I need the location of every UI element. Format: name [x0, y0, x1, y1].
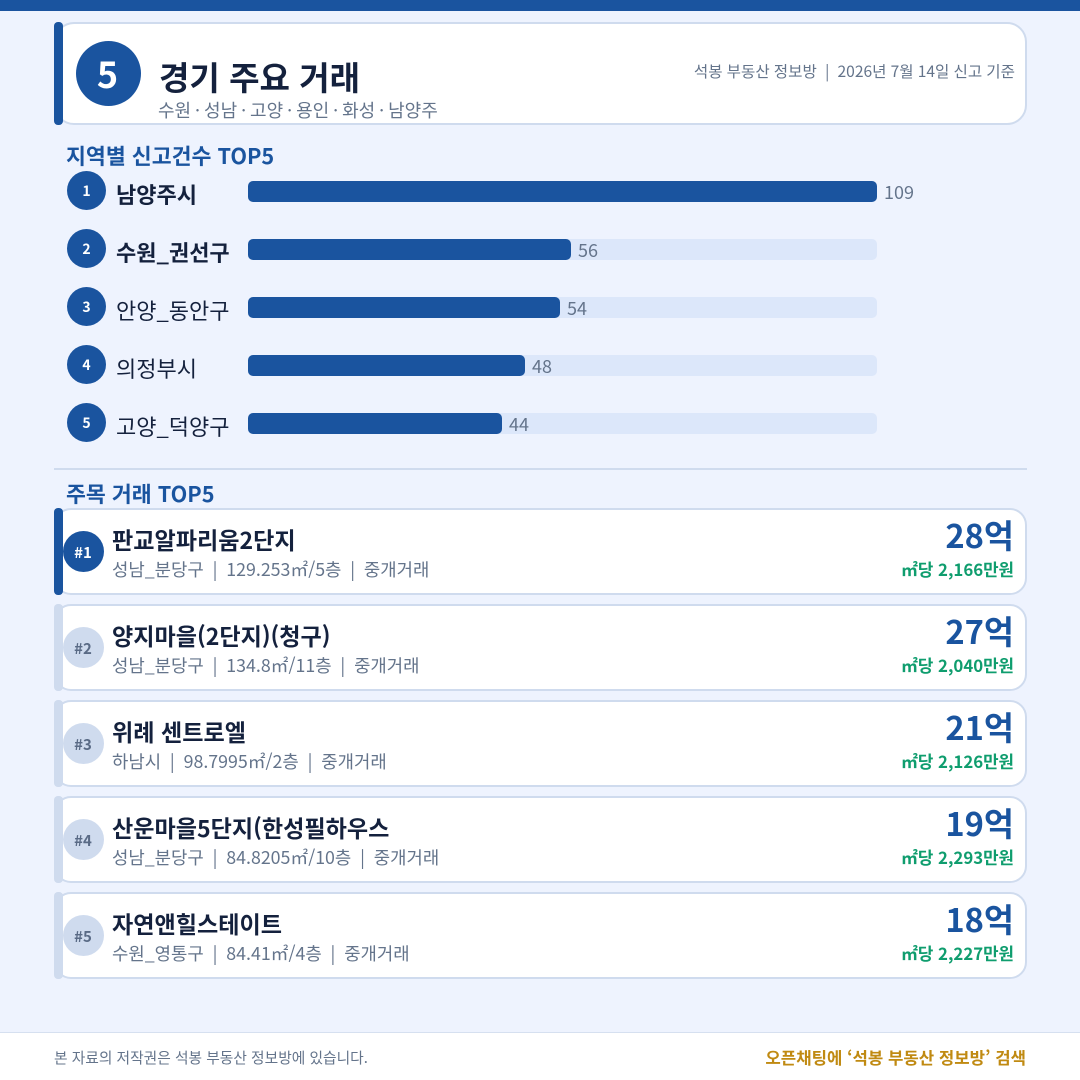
deal card 5: #5 [74, 926, 92, 947]
deal card 1: 성남_분당구 | 129.253㎡/5층 | 중개거래 [112, 556, 429, 582]
deal card 5: 수원_영통구 | 84.41㎡/4층 | 중개거래 [112, 940, 410, 966]
deal card 2: 27억 [945, 607, 1014, 654]
deal card 4: #4 [74, 830, 92, 851]
deal card 3: #3 [74, 734, 92, 755]
deal card 5: 18억 [945, 895, 1014, 942]
deal card 3: ㎡당 2,126만원 [901, 748, 1014, 772]
deal card 1: 판교알파리움2단지 [112, 522, 296, 556]
bar row 4: 48 [532, 353, 552, 379]
copyright note: 본 자료의 저작권은 석봉 부동산 정보방에 있습니다. [54, 1047, 368, 1068]
deal card 1: 28억 [945, 511, 1014, 558]
bar row 1: 1 [82, 181, 91, 201]
deal card 5 [54, 892, 1027, 979]
bar row 1: 남양주시 [116, 178, 197, 210]
title: 경기 주요 거래 [159, 52, 360, 100]
deal card 4: 성남_분당구 | 84.8205㎡/10층 | 중개거래 [112, 844, 439, 870]
bar row 1: 109 [884, 179, 914, 205]
deal card 2: #2 [74, 638, 92, 659]
deal card 2: ㎡당 2,040만원 [901, 652, 1014, 676]
source and date: 석봉 부동산 정보방 | 2026년 7월 14일 신고 기준 [694, 60, 1015, 82]
footer [0, 1032, 1080, 1080]
heading: regional ranking: 지역별 신고건수 TOP5 [66, 140, 274, 170]
bar row 5: 고양_덕양구 [116, 410, 230, 442]
deal card 2: 성남_분당구 | 134.8㎡/11층 | 중개거래 [112, 652, 420, 678]
deal card 5: 자연앤힐스테이트 [112, 906, 282, 940]
bar row 1 [67, 171, 914, 210]
bar row 4 [67, 345, 877, 384]
deal card 1 [54, 508, 1027, 595]
bar row 5: 5 [82, 413, 91, 433]
deal card 1: #1 [74, 542, 92, 563]
deal card 3 [54, 700, 1027, 787]
deal card 4 [54, 796, 1027, 883]
header accent bar [54, 22, 63, 125]
deal card 2 [54, 604, 1027, 691]
top band [0, 0, 1080, 11]
bar row 5 [67, 403, 877, 442]
bar row 3: 3 [82, 297, 91, 317]
deal card 3: 위례 센트로엘 [112, 714, 246, 748]
deal card 2: 양지마을(2단지)(청구) [112, 618, 331, 652]
bar row 5: 44 [509, 411, 529, 437]
bar row 3: 54 [567, 295, 587, 321]
header panel [54, 22, 1027, 125]
section number badge: 5 [97, 47, 118, 99]
bar row 2: 수원_권선구 [116, 236, 230, 268]
bar row 3 [67, 287, 877, 326]
deal card 5: ㎡당 2,227만원 [901, 940, 1014, 964]
bar row 4: 4 [82, 355, 91, 375]
deal card 4: 산운마을5단지(한성필하우스 [112, 810, 389, 844]
deal card 3: 하남시 | 98.7995㎡/2층 | 중개거래 [112, 748, 387, 774]
bar chart: regional report counts [67, 171, 914, 442]
bar row 2: 2 [82, 239, 91, 259]
deal card 4: 19억 [945, 799, 1014, 846]
heading: notable deals: 주목 거래 TOP5 [66, 478, 214, 508]
section number badge [76, 41, 141, 106]
subtitle: 수원 · 성남 · 고양 · 용인 · 화성 · 남양주 [158, 96, 438, 122]
bar row 3: 안양_동안구 [116, 294, 230, 326]
open chat call to action: 오픈채팅에 ‘석봉 부동산 정보방’ 검색 [765, 1045, 1026, 1069]
deal card 3: 21억 [945, 703, 1014, 750]
deal card 1: ㎡당 2,166만원 [901, 556, 1014, 580]
bar row 2: 56 [578, 237, 598, 263]
bar row 4: 의정부시 [116, 352, 197, 384]
header card background [54, 22, 1027, 125]
deal card 4: ㎡당 2,293만원 [901, 844, 1014, 868]
bar row 2 [67, 229, 877, 268]
